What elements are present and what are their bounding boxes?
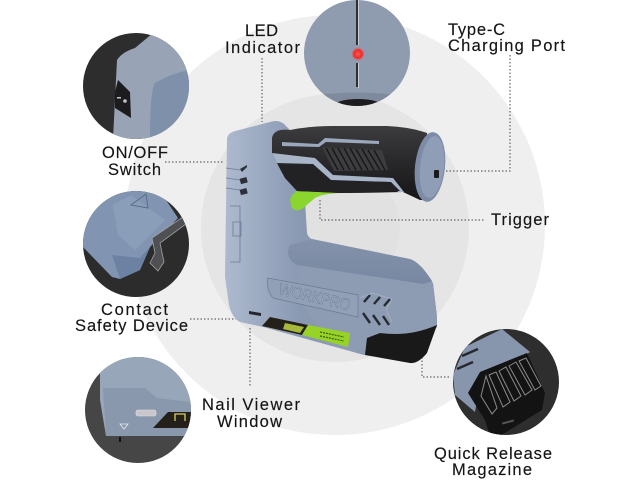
lower grip segment [278, 165, 400, 193]
label: Trigger: Trigger [491, 211, 550, 229]
label: Quick Release Magazine: Magazine [452, 461, 532, 479]
black handle [272, 126, 432, 200]
label: Quick Release Magazine: Quick Release [434, 445, 552, 463]
black label [262, 317, 308, 335]
circle: quick release magazine detail [453, 329, 559, 436]
side vents [240, 165, 248, 195]
label: Type-C Charging Port: Type-C [448, 21, 505, 39]
nail viewer window slot [249, 311, 261, 316]
left-side panel lines [226, 168, 241, 262]
circle: LED indicator detail [304, 0, 410, 113]
grip ridges [322, 147, 388, 171]
background concentric circles [125, 15, 545, 435]
handle grey trim [282, 138, 379, 147]
black magazine base [365, 325, 437, 363]
label: Nail Viewer Window: Nail Viewer [202, 396, 300, 414]
brand plate: WORKPRO [277, 281, 352, 314]
label: Contact Safety Device: Contact [101, 301, 168, 319]
magazine upper facet [288, 239, 432, 284]
vent slots [363, 295, 390, 325]
stapler body [225, 121, 437, 355]
label: Contact Safety Device: Safety Device [75, 317, 188, 335]
label: ON/OFF Switch: Switch [108, 161, 161, 179]
green trigger [290, 191, 340, 210]
label: Nail Viewer Window: Window [217, 413, 282, 431]
circle: nail viewer window detail [85, 357, 191, 463]
label: ON/OFF Switch: ON/OFF [102, 144, 168, 162]
label: LED Indicator: Indicator [225, 39, 300, 57]
stapler product illustration [225, 121, 449, 363]
label: Type-C Charging Port: Charging Port [448, 37, 565, 55]
magazine side face [297, 265, 437, 355]
circle: contact safety device detail [83, 191, 189, 297]
end cap [411, 131, 449, 203]
circle: on/off switch detail [83, 33, 189, 139]
vent outline [360, 293, 392, 322]
dotted leader lines [165, 54, 510, 387]
label: LED Indicator: LED [245, 22, 278, 40]
green label [302, 325, 350, 347]
